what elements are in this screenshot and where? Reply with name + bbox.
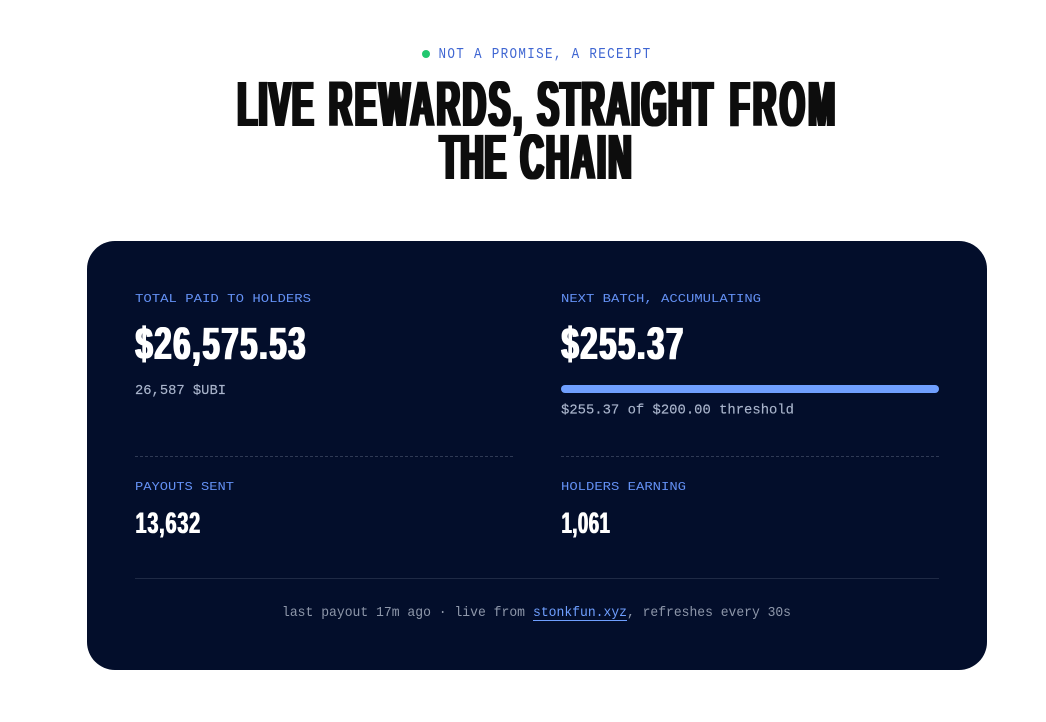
title — [238, 68, 835, 193]
stat: payouts sent: PAYOUTS SENT — [135, 480, 234, 494]
title: STRAIGHT — [538, 68, 713, 140]
stat: payouts sent: 13,632 — [136, 507, 200, 540]
stat: total paid to holders: 26,587 $UBI — [135, 383, 226, 399]
footer note: last payout 17m ago · live from — [282, 605, 525, 621]
eyebrow — [422, 46, 650, 63]
stat: total paid to holders: $26,575.53 — [136, 319, 306, 370]
footer note — [282, 605, 791, 621]
progress bar — [561, 385, 939, 393]
footer note: , refreshes every 30s — [627, 605, 791, 621]
title: FROM — [730, 68, 835, 140]
title: REWARDS, — [329, 68, 522, 140]
stat: next batch accumulating: $255.37 of $200.00 threshold — [561, 402, 794, 418]
stat: holders earning — [561, 480, 686, 540]
title: CHAIN — [520, 121, 632, 193]
stat: next batch accumulating: $255.37 — [562, 319, 683, 370]
footer note: stonkfun.xyz — [533, 605, 627, 621]
stat: total paid to holders: TOTAL PAID TO HOLDERS — [135, 292, 311, 306]
stat: payouts sent — [135, 480, 234, 540]
eyebrow text: NOT A PROMISE, A RECEIPT — [438, 46, 650, 63]
icon: green status dot — [422, 50, 430, 58]
stat: next batch accumulating: NEXT BATCH, ACCUMULATING — [561, 292, 761, 306]
stat: holders earning: HOLDERS EARNING — [561, 480, 686, 494]
stat: next batch accumulating — [561, 292, 939, 418]
title: LIVE — [238, 68, 314, 140]
stat: total paid to holders — [135, 292, 311, 399]
stat: holders earning: 1,061 — [562, 507, 610, 540]
panel: live stats — [87, 241, 987, 670]
title: THE — [440, 121, 506, 193]
